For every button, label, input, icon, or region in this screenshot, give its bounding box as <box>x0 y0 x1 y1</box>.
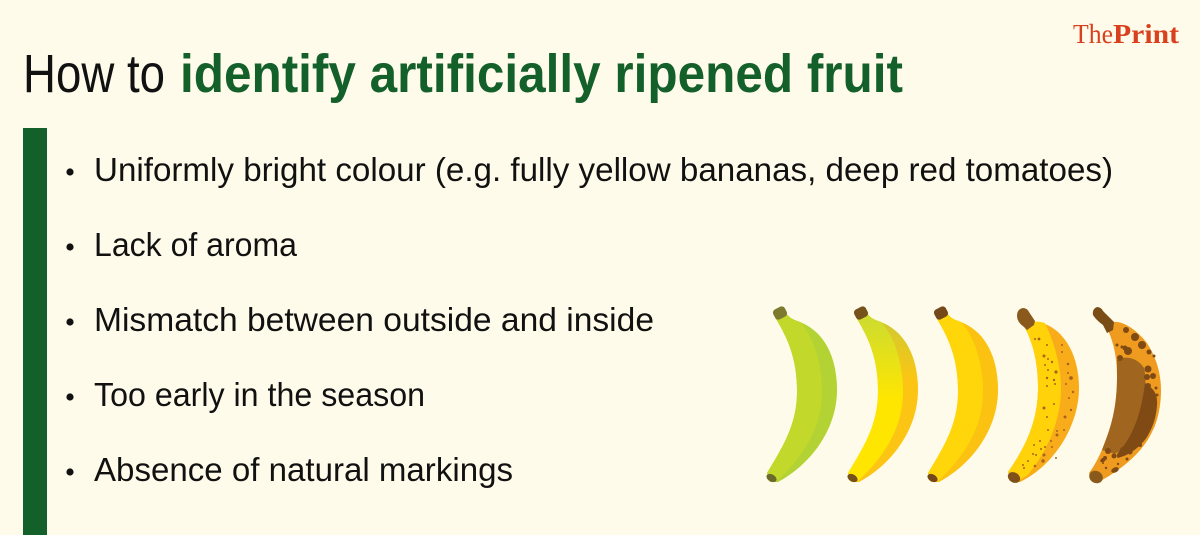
logo: ThePrint: Print <box>1113 19 1179 49</box>
bullet list <box>66 152 1113 489</box>
brown patch <box>1102 358 1146 454</box>
bullet: mismatch: Mismatch between outside and inside <box>94 302 654 339</box>
banana ripeness illustration <box>765 305 1161 486</box>
bullet: too early: Too early in the season <box>94 377 425 414</box>
logo: ThePrint: The <box>1073 19 1113 49</box>
bullet: uniformly bright colour: Uniformly bright colour (e.g. fully yellow bananas, deep red tomatoes) <box>94 152 1113 189</box>
title: How to <box>23 44 165 104</box>
title: identify artificially ripened fruit <box>180 44 903 104</box>
icon: overripe brown banana <box>1087 307 1161 486</box>
icon: spotted banana <box>1006 308 1079 485</box>
icon: ripe banana <box>926 305 998 484</box>
bullet: lack of aroma: Lack of aroma <box>94 227 297 264</box>
bullet: absence of markings: Absence of natural markings <box>94 452 513 489</box>
icon: green banana <box>765 305 837 484</box>
green side bar <box>23 128 47 535</box>
icon: yellow banana <box>846 305 918 484</box>
logo: ThePrint <box>1073 19 1179 49</box>
